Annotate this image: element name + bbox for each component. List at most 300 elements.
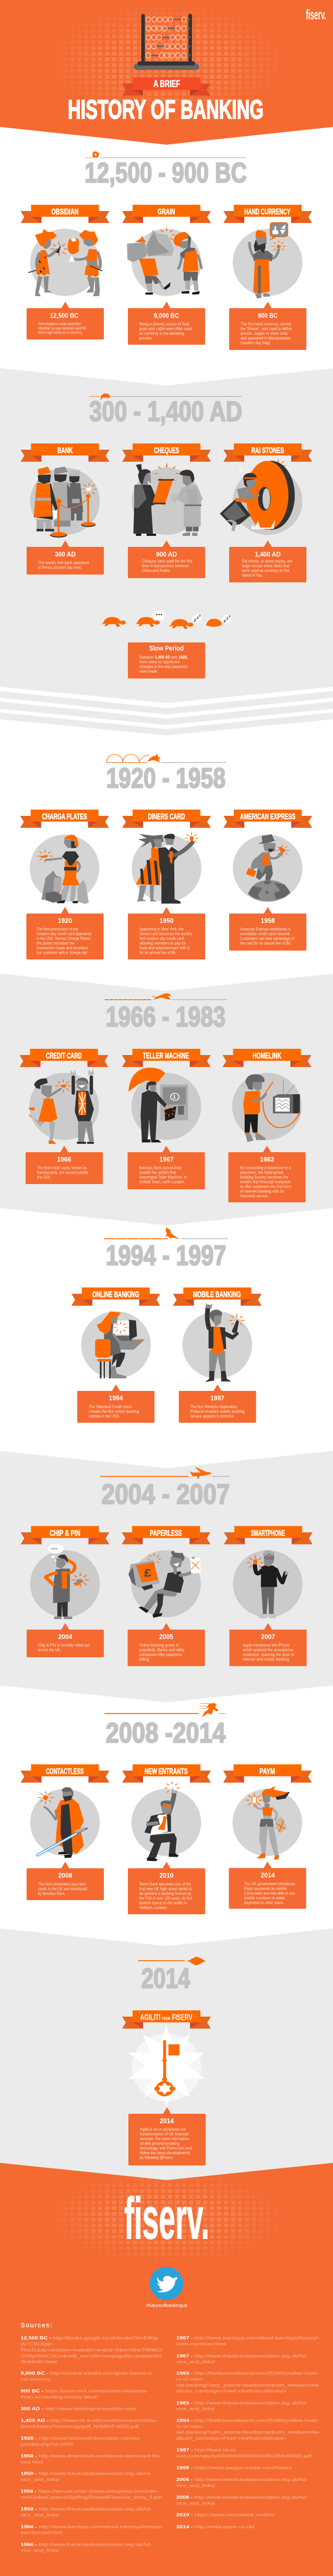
sources: right column: 1997 - http://feed.ne.ci- [176, 2448, 237, 2453]
ribbon: Mobile banking: MOBILE BANKING [193, 1291, 241, 1299]
ribbon: Cheques: CHEQUES [154, 447, 179, 455]
illustration: man with paperless bill: £ [144, 1567, 151, 1579]
ribbon: Charga plates: CHARGA PLATES [42, 813, 87, 822]
callout: 1994: The Standard Credit Union [89, 1404, 132, 1409]
callout: 2010: branch opens to the public in [139, 1901, 187, 1905]
callout: 1966: The first credit cards, known as [37, 1166, 87, 1170]
sources: left column: GH8gOIvKCOCw&redir_esc=y#v=onepage&q=obsidian%2 [21, 2353, 162, 2358]
illustration: man with shekel [233, 223, 302, 299]
ribbon: Homelink: HOMELINK [253, 1052, 282, 1061]
background bands [0, 368, 333, 2194]
callout: 900 BC: and appeared in Mesopotamia [241, 336, 291, 341]
section: 2008 - 2014 [21, 1703, 312, 1914]
callout: 2007: internet and mobile banking. [243, 1657, 290, 1662]
sources: left column: 1966 - http://www.barclays.com/about-barclays/history/- [21, 2524, 164, 2529]
heading: 2008 - 2014 with runner: 2008 -2014 [106, 1717, 225, 1749]
callout: 2014 Agiliti: on this ground-breaking [140, 2141, 180, 2146]
heading: 1994 - 1997 with bird [104, 1227, 228, 1271]
sources: left column: net/GlobalCareers/Staffing/Shared/Files/our_story_3.pdf [21, 2495, 162, 2500]
callout: 2010: the FSA in over 100 years. Its first [139, 1896, 193, 1901]
ribbon: Smartphone: SMARTPHONE [251, 1529, 285, 1538]
illustration: man with mobile phone [183, 1303, 252, 1382]
ribbon: Online banking: ONLINE BANKING [92, 1291, 139, 1299]
icon: row of sleepy turtles: z [229, 614, 231, 618]
ribbon: Agiliti from Fiserv: AGILITI FROM FISERV [140, 2013, 193, 2022]
callout: 2014 Agiliti: services. For more information [140, 2137, 189, 2141]
card: Credit card [20, 1049, 109, 1184]
ribbon: Smartphone [224, 1526, 313, 1544]
illustration: couple with Barclaycard [29, 1069, 99, 1144]
callout: 2014: 2014 [261, 1871, 275, 1879]
callout: 9,000 BC: Being a primary source of food, [139, 322, 190, 326]
callout: 1967: installs the world's first [139, 1170, 176, 1175]
ribbon: Rai stones [223, 443, 312, 462]
icon: Twitter [150, 2267, 183, 2300]
section: 2004 - 2007 [21, 1467, 313, 1666]
ribbon: Obsidian [21, 205, 110, 223]
callout: 2010: first new UK high street banks to [139, 1887, 192, 1891]
callout: 2005: Online banking grows in [139, 1643, 179, 1648]
ribbon: Teller machine [122, 1049, 211, 1067]
ribbon: Diners card [122, 810, 211, 828]
card: Cheques [122, 443, 211, 578]
sources: left column: vice_and_links/ [21, 2548, 60, 2553]
sources: left column: 9,000 BC - http://arcana.wikidot.com/grain-based-lo- [21, 2371, 154, 2376]
ribbon: Charga plates [20, 810, 109, 828]
card: Paperless [122, 1526, 210, 1666]
callout: 900 BC [229, 302, 306, 350]
callout: 1958: the card for an annual fee of $6. [240, 941, 291, 945]
sources: left column [21, 2336, 164, 2553]
callout: 2014: Consumers are now able to use [244, 1891, 295, 1896]
sources: left column: 900 BC - https://www.mint.com/ancient-mesopota- [21, 2389, 149, 2394]
callout: 900 AD: time in transactions between [142, 564, 189, 568]
callout: 2008 [27, 1861, 104, 1900]
illustration: two men exchanging a cheque [132, 462, 203, 536]
ribbon: Bank [21, 443, 110, 462]
sources: right column: vice_and_links/ [176, 2360, 216, 2364]
callout: 2014 Agiliti: 2014 [160, 2117, 174, 2125]
ribbon: Contactless [21, 1764, 110, 1783]
ribbon: A BRIEF: A BRIEF [153, 78, 180, 89]
callout: 2004: Chip & PIN is formally rolled out [38, 1643, 90, 1648]
heading: 12,500 - 900 BC with snail: 12,500 - 900 BC [85, 157, 247, 189]
sources: right column: net-banking/?utm_source=feedburner&utm_medium=fee [176, 2430, 319, 2435]
callout: 2007: Apple introduced the iPhone [243, 1643, 290, 1648]
callout: 12,500 BC: 12,500 BC [50, 312, 79, 320]
heading: 2004 - 2007 with plane [100, 1467, 230, 1510]
callout: 1983: 1983 [260, 1155, 274, 1163]
callout: Slow Period: Slow Period [149, 645, 184, 652]
callout: 1997: The first Wireless Application [191, 1404, 237, 1409]
sources: right column: 1967 - http://www.barclays.com/about-barclays/history/- [176, 2336, 320, 2340]
illustration: woman and rai stone [220, 458, 302, 535]
sources: left column: 1950 - http://www.theukcardsassociation.org.uk/Ad- [21, 2472, 152, 2476]
callout: 1920: the plates recorded the [37, 941, 75, 945]
sources: left column: 0trade&f=false [21, 2360, 57, 2364]
card: Contactless [21, 1764, 110, 1900]
card: Online banking [72, 1287, 160, 1423]
card: Diners card [122, 810, 211, 959]
sources: right column: 1999 - https://www.paypal-media.com/history [176, 2465, 293, 2470]
callout: 1997: Protocol enabled mobile banking [191, 1409, 245, 1414]
callout: 1994: 1994 [109, 1394, 123, 1402]
header panel [0, 0, 333, 145]
callout: 1920: modern-day credit card appeared [37, 931, 91, 936]
callout: 2005: companies offer paperless [139, 1653, 182, 1657]
ribbon: American Express [223, 810, 312, 828]
callout: 1983 [228, 1146, 305, 1202]
callout: 1950: Diners card becomes the world's [139, 931, 192, 936]
heading: 300 - 1,400 AD with turtle: 300 - 1,400 AD [89, 396, 242, 427]
callout: 2014 Agiliti: transformation of UK financial [140, 2132, 188, 2137]
callout: 1920: The first precursors to the [37, 927, 78, 931]
callout: 1950: food and entertainment with it, [139, 945, 191, 950]
callout: 2008: by Barclays Bank. [38, 1891, 66, 1896]
callout: 1967: 1967 [160, 1155, 173, 1163]
callout: 1983: of internet banking with its [240, 1189, 284, 1194]
callout: 1920: in the USA. Named 'Charga Plates', [37, 936, 91, 941]
callout: 1997 [179, 1384, 256, 1423]
illustration: cave people trading obsidian [29, 229, 102, 296]
ribbon: Hand currency: HAND CURRENCY [244, 208, 291, 217]
illustration: man with lightsaber [30, 1787, 100, 1858]
callout: 1920: transaction made and provided [37, 945, 88, 950]
callout: 2008: cards in the UK are introduced [38, 1887, 87, 1891]
callout: 12,500 BC: obsidian (a raw material used for [38, 326, 87, 331]
sources: left column: 12,500 BC - http://books.google.co.uk/books?id=EtiKg- [21, 2336, 159, 2340]
callout: 2010 [128, 1861, 205, 1914]
ribbon: New entrants: NEW ENTRANTS [145, 1767, 188, 1776]
logo: fiserv large: fiserv. [124, 2186, 209, 2251]
icon: abacus [134, 14, 199, 70]
callout: 900 AD [128, 540, 205, 578]
sources: right column: ry-of-inter- [176, 2424, 204, 2429]
ribbon: Hand currency [223, 205, 312, 223]
illustration: man at cash machine [128, 1068, 201, 1142]
sources: right column: vice_and_links/ [176, 2501, 216, 2505]
callout: 1983: Building Society becomes the [240, 1175, 289, 1180]
card: Teller machine [122, 1049, 211, 1189]
ribbon: Mobile banking [173, 1287, 261, 1306]
card: Agiliti from Fiserv [122, 2010, 211, 2165]
sources: right column: d&utm_campaign=Feed:+thefinancialbrand+ [176, 2436, 287, 2441]
callout: 2014 Agiliti: by following @Fiserv. [140, 2156, 174, 2160]
callout: 2008: The first contactless payment [38, 1882, 86, 1887]
callout: 2007 [230, 1623, 307, 1666]
callout: 1920: 1920 [58, 917, 72, 924]
callout: 2005 [128, 1623, 205, 1666]
callout: 2008: 2008 [58, 1871, 72, 1879]
card: New entrants [122, 1764, 211, 1914]
illustration: man thinking about chip and PIN: #&% [51, 1548, 58, 1550]
callout: 900 AD: 900 AD [156, 551, 177, 558]
sources: left column: 1950 - http://www.dinersclub.com/press-room/card-his- [21, 2454, 162, 2458]
callout: 1966: Barclaycards, are issued outside [37, 1170, 88, 1175]
callout: 1966: the USA. [37, 1175, 51, 1180]
ribbon: A BRIEF [122, 77, 210, 96]
callout: 900 BC: bronze, copper or silver units [241, 331, 288, 336]
callout: 1950 [128, 907, 205, 959]
card: Charga plates [20, 810, 109, 959]
callout: 2005: 2005 [159, 1633, 173, 1641]
ribbon: Teller machine: TELLER MACHINE [143, 1052, 189, 1061]
callout: 300 AD: 300 AD [55, 551, 76, 558]
callout: 12,500 BC: stone-age tools) as a currency. [38, 330, 82, 335]
sources: right column: sion.com/wpyfs/00/00/00/00/00/00/90/2E/bit0002.pdf [176, 2454, 312, 2458]
sources: left column: PA141&dq=obsidian+trade&hl=en&sa=X&ei=h9vcT6bWCc [21, 2348, 163, 2352]
ribbon: Chip & PIN [21, 1526, 110, 1544]
callout: 300 AD [27, 540, 104, 575]
callout: 2014: The UK government introduces [244, 1881, 295, 1887]
callout: 1967 [127, 1146, 205, 1189]
callout: 1997: 1997 [210, 1394, 224, 1402]
illustration: couple with diners card [132, 832, 201, 904]
section: 2014 Agiliti [122, 1957, 211, 2165]
callout: Slow Period [128, 642, 205, 678]
callout: 9,000 BC: 9,000 BC [154, 312, 180, 320]
callout: 900 BC: (modern day Iraq). [241, 341, 271, 345]
ribbon: Paperless: PAPERLESS [150, 1529, 182, 1538]
section: 1966 - 1983 [20, 993, 311, 1202]
ribbon: Chip & PIN: CHIP & PIN [50, 1529, 80, 1538]
callout: 1983: to offer customers the first form [240, 1185, 291, 1189]
ribbon: Cheques [122, 443, 211, 462]
callout: 1958 [229, 907, 306, 951]
callout: 1950: first modern day credit card, [139, 936, 185, 941]
sources: right column: ry-of-inter- [176, 2377, 204, 2382]
callout: 2010: be granted a banking licence by [139, 1891, 192, 1896]
callout: 2004 [27, 1623, 104, 1657]
card: Obsidian [21, 205, 110, 339]
card: Paym [223, 1764, 312, 1908]
callout: 2004: across the UK. [38, 1648, 61, 1653]
heading: 2014 with rocket: 2014 [141, 1963, 190, 1994]
callout: 12,500 BC [27, 302, 104, 339]
sources: left column: vice_and_links/ [21, 2513, 60, 2518]
sources: left column: 1966 - http://www.theukcardsassociation.org.uk/Ad- [21, 2542, 152, 2547]
sources: left column: vice_and_links/ [21, 2477, 60, 2482]
sources: left column: 1958 - http://www.theukcardsassociation.org.uk/Ad- [21, 2507, 152, 2512]
callout: 9,000 BC: process. [139, 336, 152, 341]
callout: 1,400 AD: Rai stones, or stone money, are [242, 559, 292, 564]
icon: row of sleepy turtles: z [199, 613, 201, 617]
card: Hand currency [223, 205, 312, 350]
callout: 1983: world's first financial institution [240, 1180, 291, 1185]
ribbon: American Express: AMERICAN EXPRESS [240, 813, 295, 822]
callout: 1994: website in the USA. [88, 1414, 120, 1419]
callout: 1,400 AD [229, 540, 306, 582]
heading: 1966 - 1983 with cheetah [105, 993, 227, 1033]
illustration: woman with phone and TV [232, 1073, 302, 1142]
sources: left column: tory.html [21, 2460, 43, 2464]
section: 1920 - 1958 [20, 754, 312, 959]
callout: 2014 Agiliti: Agiliti is set to accelerate the [140, 2127, 186, 2132]
ribbon: Online banking [72, 1287, 160, 1306]
sources: right column: 2010 - https://www.metrobank.london/ [176, 2513, 276, 2518]
illustration: traveller on globe [233, 834, 302, 902]
card: Rai stones [220, 443, 312, 582]
card: Smartphone [224, 1526, 313, 1666]
sources: left column: dv7C3IC&pg=- [21, 2342, 55, 2347]
section: 1994 - 1997 [72, 1227, 261, 1423]
callout: 1,400 AD: island of Yap. [242, 573, 263, 578]
sources: left column: panded.php?id=2045 [21, 2442, 74, 2446]
illustration: woman at computer [81, 1312, 151, 1378]
icon: row of sleepy turtles: z [196, 616, 199, 620]
footer panel [0, 2163, 333, 2576]
ribbon: Rai stones: RAI STONES [252, 447, 284, 455]
illustration: woman shopping [30, 835, 99, 904]
callout: 900 AD: Cheques were used for the first [142, 559, 193, 564]
callout: Slow Period: there were no significant [139, 660, 180, 664]
callout: 1950: Appearing in New York, the [139, 927, 184, 931]
callout: 1983: television, the Nottingham [240, 1170, 284, 1175]
heading: 1920 - 1958 with rabbit: 1920 - 1958 [106, 763, 225, 794]
sources: right column: vice_and_links/ [176, 2407, 216, 2411]
sources: right column: vice_and_links/ [176, 2483, 216, 2488]
hashtag: #futureofbankinguk [146, 2303, 187, 2309]
ribbon: Paperless [122, 1526, 210, 1544]
callout: 1994: creates the first online banking [89, 1409, 139, 1414]
callout: Slow Period: changes in the way payments [139, 664, 188, 669]
callout: 900 BC: 900 BC [258, 312, 278, 320]
sources: right column [176, 2336, 320, 2529]
star and key illustration [128, 2025, 205, 2107]
sources: left column: barclaycard.html [21, 2531, 62, 2535]
callout: 1967: Enfield Town, north London. [139, 1180, 185, 1185]
heading: 12,500 - 900 BC with snail [85, 151, 247, 189]
heading: 2008 - 2014 with runner [104, 1703, 225, 1749]
card: American Express [223, 810, 312, 951]
sources: left column: 1,400 AD - http://www.sil.si.edu/smithsoniancontribu- [21, 2418, 158, 2423]
heading: 1920 - 1958 with rabbit [106, 754, 225, 794]
callout: 2014 Agiliti [128, 2107, 206, 2165]
ribbon: Contactless: CONTACTLESS [46, 1767, 84, 1776]
sources: left column: cal-currency [21, 2377, 52, 2382]
sources: right column: cash-machines.html [176, 2342, 226, 2347]
callout: 900 BC: the 'Shekel' , was used to define [241, 326, 292, 331]
callout: 1967: Barclays Bank successfully [139, 1166, 182, 1170]
callout: 900 AD: China and Arabia. [142, 568, 171, 573]
ribbon: Paym [223, 1764, 312, 1783]
sources: left column: mian-accounting-money-labor/ [21, 2395, 99, 2399]
illustration: man at cash machine: 1 [173, 1095, 176, 1100]
card: Homelink [222, 1049, 311, 1202]
illustration: woman with phone [233, 1786, 302, 1860]
sources: left column: tions/HistoryTechnology/pdf_hi/SSHT-0023.pdf [21, 2424, 139, 2429]
sources: left column: 300 AD - http://www.bankingcareersinfo.com/ [21, 2407, 137, 2411]
illustration: man thinking about chip and PIN [30, 1544, 100, 1619]
callout: 2014: mobile numbers to make [244, 1896, 285, 1900]
callout: 900 BC: The first hand currency, named [241, 322, 291, 326]
callout: 2007: 2007 [261, 1633, 275, 1641]
callout: 1950: allowing members to pay for [139, 941, 186, 945]
callout: 2010: 2010 [160, 1871, 173, 1879]
illustration: man with smartphone [233, 1550, 303, 1618]
card: Bank [21, 443, 110, 575]
callout: 1983: Homelink service. [240, 1194, 269, 1199]
ribbon: Credit card [20, 1049, 109, 1067]
section: 300 - 1,400 AD [21, 393, 312, 678]
callout: 1,400 AD: 1,400 AD [255, 551, 281, 558]
callout: 2007: which sparked the smartphone [242, 1648, 293, 1653]
callout: 1950: for an annual fee of $5. [139, 950, 176, 955]
callout: 2014: payments to other users. [244, 1900, 284, 1905]
callout: 12,500 BC: Homosapiens used anatolian [38, 322, 81, 326]
ribbon: Homelink [222, 1049, 311, 1067]
sources: right column: 2004 - http://www.theukcardsassociation.org.uk/Ad- [176, 2477, 308, 2482]
callout: 9,000 BC: as currency in the bartering [139, 331, 184, 336]
callout: 300 AD: The world's first bank appeared [38, 560, 89, 565]
callout: 9,000 BC: grain and cattle were often used [139, 326, 192, 331]
callout: 1983: By connecting a telephone to a [240, 1166, 291, 1170]
ribbon: Diners card: DINERS CARD [148, 813, 185, 822]
icon: row of sleepy turtles: z [194, 618, 197, 623]
callout: 1958: 1958 [261, 917, 275, 924]
heading: 1994 - 1997 with bird: 1994 - 1997 [106, 1240, 226, 1271]
ribbon: Grain: GRAIN [158, 208, 175, 217]
callout: 2010: Metro Bank becomes one of the [139, 1882, 191, 1887]
callout: 1958: Customers can take advantage of [240, 936, 294, 941]
callout: 2010: Holborn, London. [139, 1905, 168, 1910]
callout: 2014 Agiliti: follow the latest developments [140, 2151, 190, 2156]
callout: 1958: American Express establishes a [240, 927, 290, 931]
sources: right column: net-banking/?utm_source=feedburner&utm_medium=fee [176, 2383, 319, 2387]
callout: 1966 [26, 1146, 103, 1184]
callout: 1,400 AD: were used as currency on the [242, 568, 290, 573]
sources: right column: 2008 - http://www.theukcardsassociation.org.uk/Ad- [176, 2495, 308, 2500]
illustration: bartering grain [127, 227, 201, 296]
callout: 2005: billing. [139, 1657, 150, 1662]
sources: right column: 1983 - http://www.theukcardsassociation.org.uk/Ad- [176, 2401, 308, 2405]
sources heading: Sources: [21, 2322, 52, 2329]
callout: 2014 [229, 1861, 306, 1908]
callout: 9,000 BC [128, 302, 205, 345]
callout: 1920 [26, 907, 103, 959]
callout: 2005: popularity. Banks and utility [139, 1648, 185, 1653]
callout: 1966: 1966 [57, 1155, 71, 1163]
section: 12,500 - 900 BC [21, 151, 312, 350]
callout: 2014: Paym payments by mobile. [244, 1887, 288, 1891]
callout: 2014 Agiliti: technology, visit Fiserv.com and [140, 2146, 192, 2151]
ribbon: Agiliti from Fiserv [122, 2010, 211, 2029]
icon: row of sleepy turtles [101, 611, 233, 629]
ribbon: Paym: PAYM [259, 1767, 275, 1776]
ribbon: New entrants [122, 1764, 211, 1783]
illustration: businessman dancing [132, 1781, 201, 1861]
callout: 1,400 AD: large circular stone disks that [242, 564, 290, 568]
heading: 1966 - 1983 with cheetah: 1966 - 1983 [106, 1001, 225, 1033]
sources: left column: 1920 - http://www.historyofinformation.com/ex- [21, 2436, 141, 2441]
ribbon: Obsidian: OBSIDIAN [51, 208, 78, 217]
card: Grain [122, 205, 211, 345]
callout: 2004: 2004 [58, 1633, 73, 1641]
card: Mobile banking [173, 1287, 261, 1423]
illustration: first bank queue [30, 466, 100, 537]
sources: right column: d&utm_campaign=Feed:+thefinancialbrand+ [176, 2389, 287, 2394]
sources: right column: 2014 - http://www.paym.co.uk/ [176, 2524, 255, 2529]
heading: 2004 - 2007 with plane: 2004 - 2007 [101, 1479, 230, 1510]
callout: 1997: service appears in America. [191, 1414, 234, 1419]
callout: 1950: 1950 [160, 917, 173, 924]
ribbon: Bank: BANK [57, 447, 73, 455]
ribbon: Grain [122, 205, 211, 223]
sources: right column: 1967 - http://www.theukcardsassociation.org.uk/Ad- [176, 2353, 308, 2358]
sources: left column: 1958 - https://secure.cmax.americanexpress.com/Inter- [21, 2489, 159, 2494]
card: Chip & PIN [21, 1526, 110, 1657]
icon: row of sleepy turtles: z [223, 618, 227, 623]
